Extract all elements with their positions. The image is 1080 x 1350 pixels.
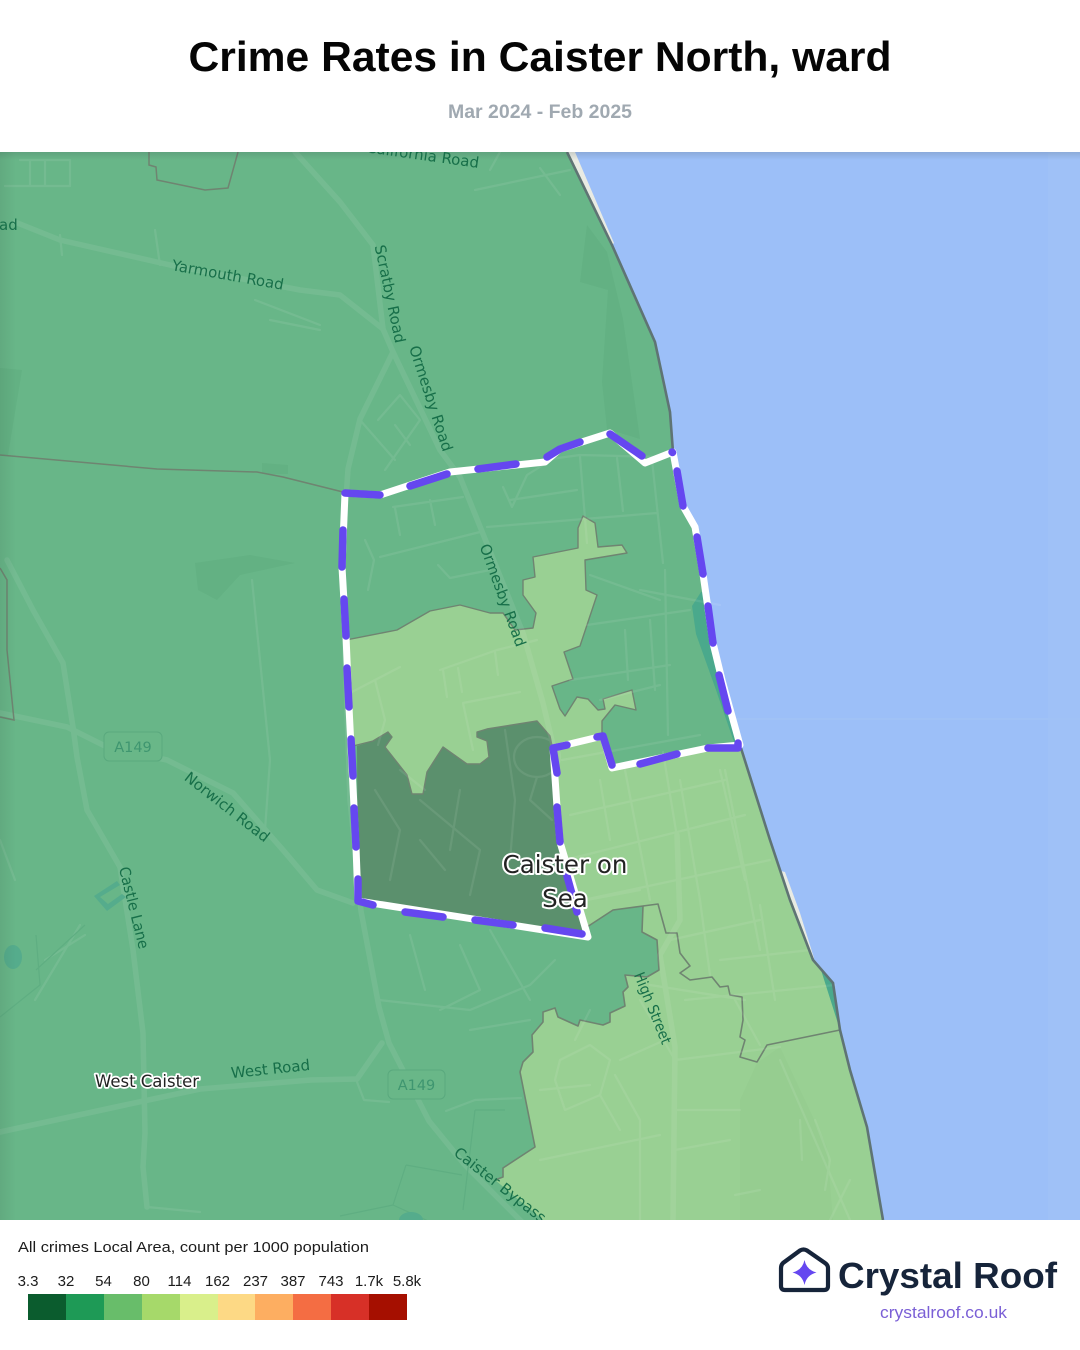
road labels: Ormesby Road bbox=[476, 541, 530, 649]
legend scale values: 5.8k bbox=[393, 1273, 422, 1290]
legend title: All crimes Local Area, count per 1000 population bbox=[18, 1239, 369, 1256]
area: low-crime dark zone in ward bbox=[357, 721, 588, 937]
ward boundary: white base bbox=[342, 433, 740, 937]
area: light green zone south-east bbox=[495, 736, 883, 1220]
legend scale values: 32 bbox=[58, 1273, 74, 1290]
coastal teal strip bbox=[692, 592, 840, 1030]
road labels: Castle Lane bbox=[115, 865, 153, 951]
subtitle: date range: Mar 2024 - Feb 2025 bbox=[448, 102, 632, 123]
boundary lines outside ward bbox=[0, 152, 343, 720]
legend scale values: 54 bbox=[95, 1273, 112, 1290]
road labels: High Street bbox=[630, 970, 675, 1047]
road labels: West Road bbox=[230, 1056, 311, 1082]
legend scale values: 1.7k bbox=[355, 1273, 384, 1290]
road network bbox=[0, 152, 850, 1240]
website url: crystalroof.co.uk bbox=[880, 1304, 1008, 1322]
map edge shading bbox=[0, 152, 1080, 158]
road labels bbox=[0, 138, 675, 1227]
wordmark: Crystal Roof bbox=[838, 1255, 1058, 1296]
coastline edge bbox=[567, 152, 883, 1220]
area: light green zone in ward bbox=[346, 516, 636, 794]
place label: Caister on Sea: Caister on bbox=[503, 850, 627, 879]
place label: Caister on Sea: Sea bbox=[542, 884, 588, 913]
legend scale values: 3.3 bbox=[18, 1273, 38, 1290]
legend scale values: 743 bbox=[318, 1273, 344, 1290]
water features bbox=[4, 881, 423, 1228]
road shield A149 south bbox=[388, 1070, 445, 1099]
legend scale values: 80 bbox=[133, 1273, 150, 1290]
legend bbox=[18, 1239, 422, 1320]
road labels: Scratby Road bbox=[371, 243, 409, 345]
legend scale values bbox=[18, 1273, 422, 1290]
place label: Caister on Sea bbox=[503, 850, 627, 913]
legend scale values: 114 bbox=[168, 1273, 191, 1290]
legend scale values: 162 bbox=[205, 1273, 230, 1290]
shaded scrub patch south-east bbox=[740, 1047, 833, 1220]
road labels: Norwich Road bbox=[181, 768, 273, 846]
land: base crime-rate area bbox=[0, 152, 734, 1220]
road shield A149 north bbox=[104, 732, 162, 761]
road labels: California Road bbox=[365, 138, 480, 172]
road shield A149 north: A149 bbox=[114, 740, 152, 756]
legend scale values: 387 bbox=[280, 1273, 306, 1290]
ward boundary: purple dashes bbox=[342, 434, 738, 934]
icon: house with star bbox=[781, 1250, 828, 1290]
legend colour bar bbox=[28, 1294, 407, 1320]
place label: West Caister: West Caister bbox=[95, 1072, 199, 1092]
road labels: Ormesby Road bbox=[405, 343, 456, 454]
legend scale values: 237 bbox=[243, 1273, 268, 1290]
logo: Crystal Roof bbox=[781, 1250, 1058, 1322]
road labels: Yarmouth Road bbox=[170, 256, 285, 294]
road shield A149 south: A149 bbox=[398, 1078, 435, 1094]
woodland patches bbox=[0, 225, 640, 600]
thin lanes south of ward bbox=[0, 925, 505, 1240]
title: Crime Rates in Caister North, ward bbox=[188, 33, 892, 80]
beach slivers bbox=[567, 152, 814, 958]
area outlines south bbox=[495, 904, 840, 1180]
road labels: Caister Bypass bbox=[450, 1143, 550, 1227]
sea bbox=[575, 152, 1048, 1220]
